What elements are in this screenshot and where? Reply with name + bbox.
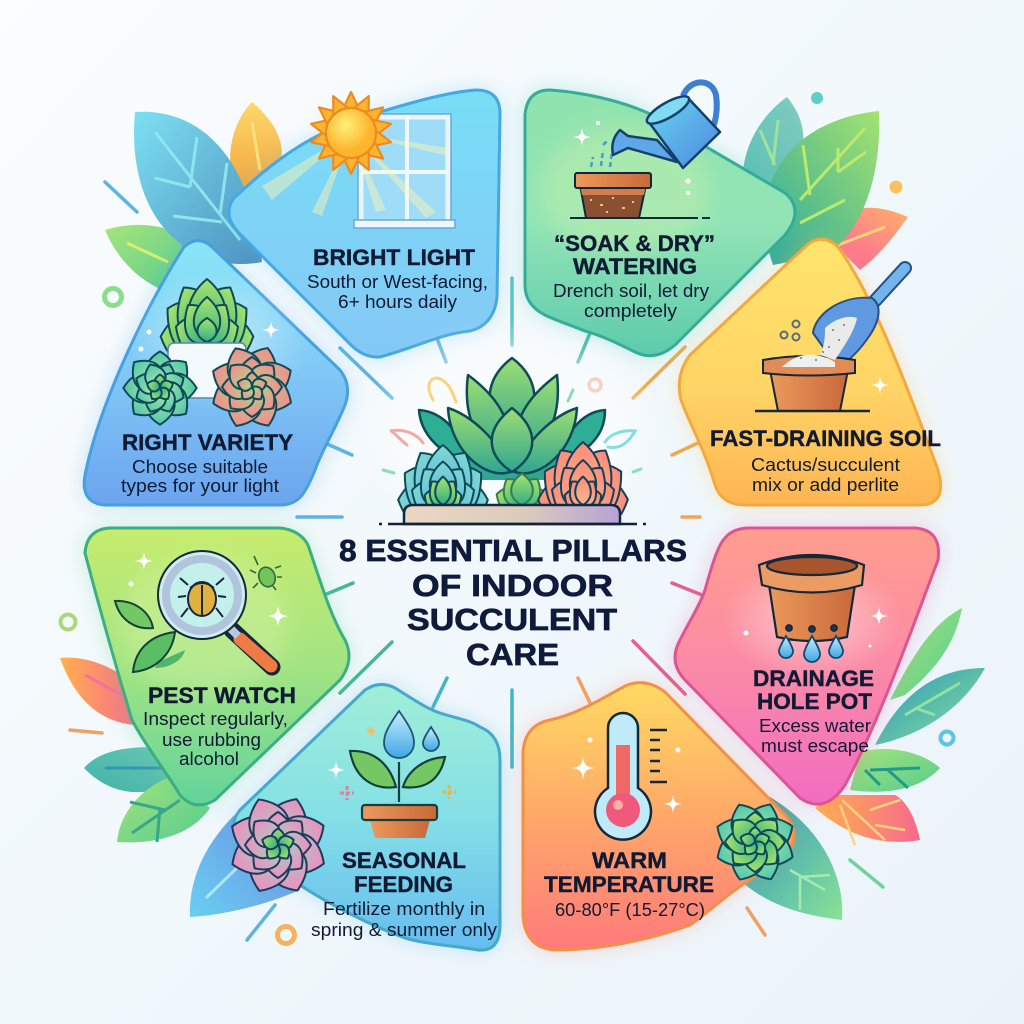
heading: warm temperature <box>544 848 714 897</box>
icon: sun rays <box>262 133 448 218</box>
text: watering detail: Drench soil, let dry <box>553 280 710 301</box>
icon: sparkles <box>573 121 690 195</box>
panel: bright light <box>229 90 500 357</box>
text: watering detail <box>553 280 710 321</box>
icon: water drops <box>384 711 439 758</box>
accent petals <box>383 378 641 473</box>
title: CARE <box>466 637 559 672</box>
icon: beetle <box>178 578 226 617</box>
icon: pink rosette <box>197 332 307 442</box>
text: right variety detail: types for your light <box>121 475 279 496</box>
icon: sparkles <box>571 738 682 813</box>
title: SUCCULENT <box>407 602 617 637</box>
icon: potted succulent <box>158 275 256 398</box>
panel: pest watch <box>85 528 349 805</box>
text: temperature range: 60-80°F (15-27°C) <box>555 899 705 920</box>
heading: right variety: RIGHT VARIETY <box>122 430 293 455</box>
icon: terracotta pot with perlite <box>755 355 870 411</box>
decorative leaves bottom left <box>60 658 300 917</box>
icon: sparkles <box>327 727 456 800</box>
text: drainage detail <box>759 715 871 756</box>
text: right variety detail: Choose suitable <box>132 456 268 477</box>
text: pest detail <box>143 708 288 769</box>
panel: right variety <box>84 240 348 505</box>
decorative leaves top right <box>742 97 908 270</box>
heading: seasonal feeding: FEEDING <box>354 872 453 897</box>
icon: green rosette <box>702 789 808 895</box>
icon: centre succulent arrangement <box>379 340 646 530</box>
heading: drainage hole pot: DRAINAGE <box>753 666 874 691</box>
small centre rosette <box>496 472 543 504</box>
icon: watering can <box>612 82 720 168</box>
icon: water drops <box>779 636 843 662</box>
heading: warm temperature: WARM <box>592 848 667 873</box>
accent dots <box>811 92 902 194</box>
icon: scoop <box>813 268 905 368</box>
icon: water drips <box>591 140 612 167</box>
coral rosette <box>537 441 629 515</box>
title: OF INDOOR <box>412 568 613 603</box>
heading: pest watch: PEST WATCH <box>148 683 296 708</box>
heading: drainage hole pot: HOLE POT <box>757 689 873 714</box>
icon: sprout in pot <box>350 751 445 838</box>
heading: seasonal feeding <box>342 848 466 897</box>
mint rosette <box>397 444 489 512</box>
text: feeding detail: Fertilize monthly in <box>323 898 485 919</box>
icon: thermometer <box>595 713 667 840</box>
title: 8 ESSENTIAL PILLARS <box>339 533 687 568</box>
icon: drainage pot <box>759 555 864 641</box>
decorative leaves top left <box>105 102 282 295</box>
text: bright light detail: South or West-facing, <box>307 271 488 292</box>
icon: leaves <box>115 601 185 672</box>
icon: sparkle and dots <box>138 321 280 352</box>
icon: perlite granules <box>780 320 800 340</box>
icon: sparkle and dots <box>744 607 888 648</box>
text: fast-draining detail <box>751 454 900 495</box>
connector lines and accents <box>60 182 954 944</box>
text: bright light detail: 6+ hours daily <box>338 291 458 312</box>
clipped rosettes <box>397 441 629 515</box>
icon: window <box>354 114 455 228</box>
heading: seasonal feeding: SEASONAL <box>342 848 466 873</box>
panel: soak and dry watering <box>525 82 795 356</box>
text: bright light detail <box>307 271 488 312</box>
text: drainage detail: Excess water <box>759 715 871 736</box>
icon: sun <box>309 92 393 174</box>
text: pest detail: alcohol <box>179 748 239 769</box>
panel: drainage hole pot <box>675 528 939 804</box>
heading: soak and dry watering <box>554 231 715 279</box>
text: drainage detail: must escape <box>761 735 869 756</box>
text: pest detail: Inspect regularly, <box>143 708 288 729</box>
text: feeding detail <box>311 898 498 940</box>
text: fast-draining detail: Cactus/succulent <box>751 454 900 475</box>
tray <box>404 505 620 524</box>
panel: warm temperature <box>523 683 808 950</box>
panel: fast-draining soil <box>679 239 941 505</box>
icon: small bug <box>250 556 282 590</box>
heading: soak and dry watering: “SOAK & DRY” <box>554 231 715 256</box>
icon: terracotta pot with soil <box>570 173 710 218</box>
heading: soak and dry watering: WATERING <box>573 254 697 279</box>
text: pest detail: use rubbing <box>162 729 261 750</box>
icon: pastel rosette <box>214 781 342 909</box>
text: feeding detail: spring & summer only <box>311 919 498 940</box>
icon: sparkles <box>128 552 289 627</box>
text: watering detail: completely <box>584 300 678 321</box>
icon: sparkle <box>871 376 889 394</box>
heading: drainage hole pot <box>753 666 874 714</box>
panel: seasonal feeding <box>214 684 500 950</box>
title <box>339 533 687 672</box>
text: right variety detail <box>121 456 279 496</box>
heading: warm temperature: TEMPERATURE <box>544 872 714 897</box>
heading: bright light: BRIGHT LIGHT <box>313 245 476 270</box>
icon: mint rosette <box>123 351 197 425</box>
icon: perlite pour <box>800 317 857 360</box>
icon: magnifying glass <box>158 551 272 667</box>
heading: fast-draining soil: FAST-DRAINING SOIL <box>710 426 941 451</box>
text: fast-draining detail: mix or add perlite <box>752 474 899 495</box>
decorative leaves bottom right <box>743 608 985 920</box>
